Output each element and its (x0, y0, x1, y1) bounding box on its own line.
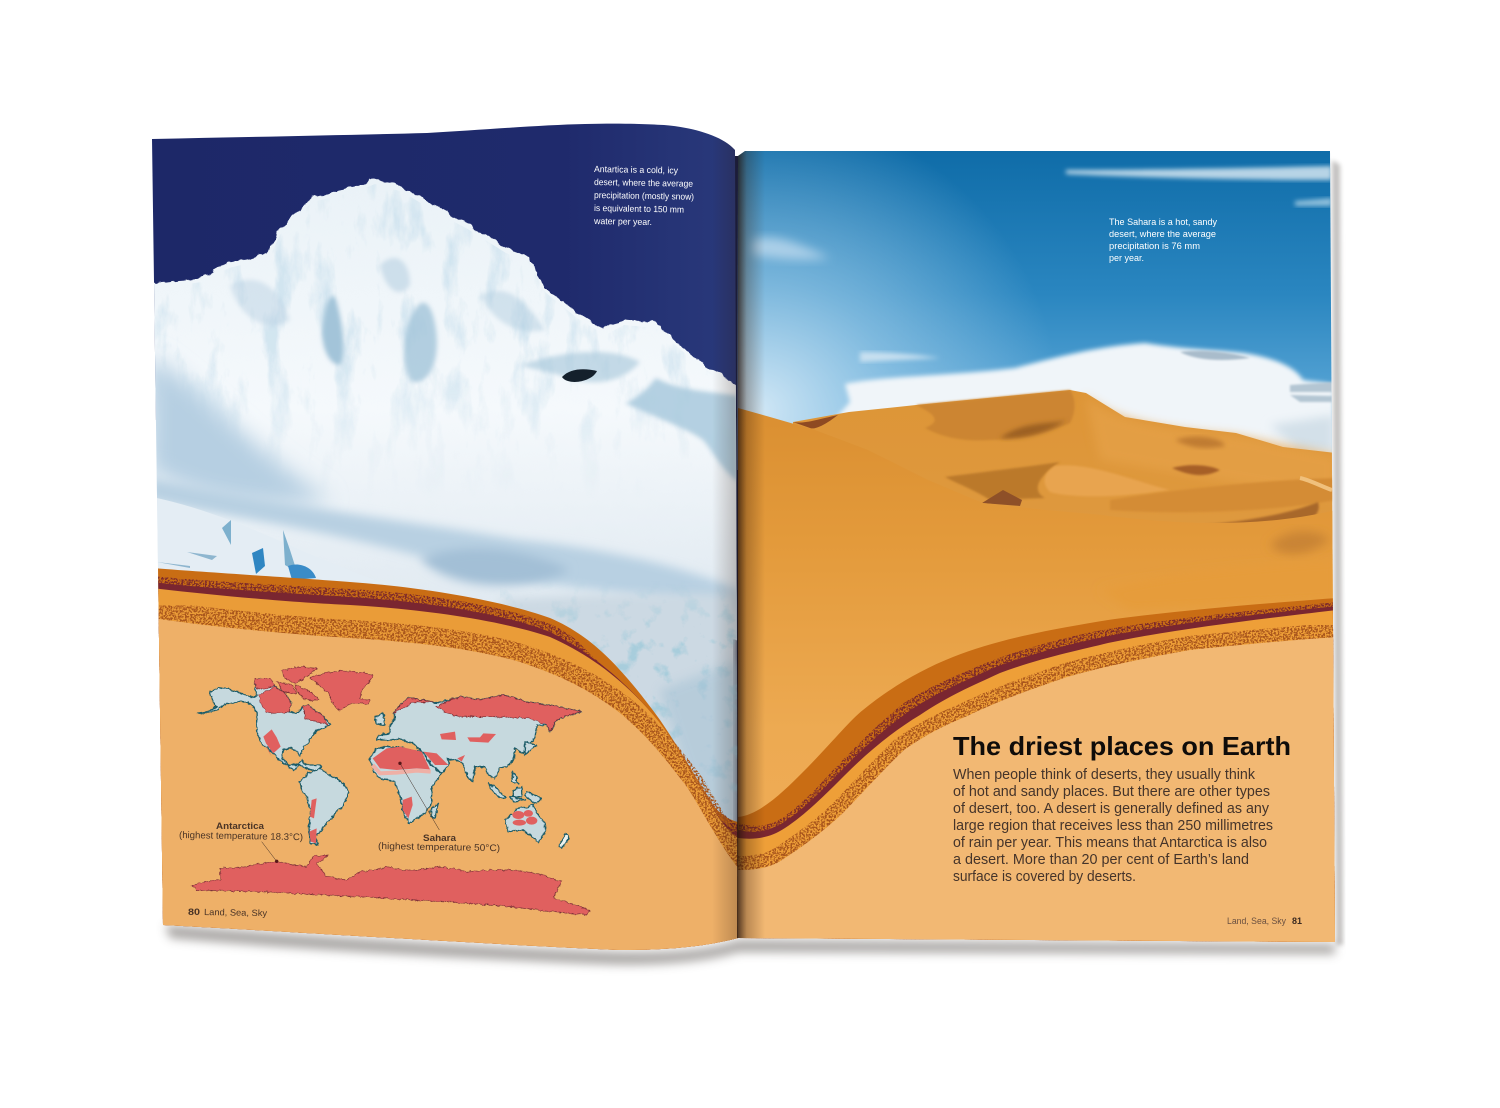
body text: When people think of deserts, they usually think (953, 767, 1256, 783)
map label: Antarctica: (highest temperature 18.3°C) (179, 830, 303, 843)
long snow shadow band (150, 478, 738, 612)
layered band: light orange (738, 610, 1340, 945)
spine shading right (737, 150, 765, 950)
continents (197, 678, 582, 848)
dark cave (562, 369, 597, 382)
panel: right page Sahara (735, 150, 1340, 950)
caption: Antarctica: desert, where the average (594, 177, 693, 189)
body text: of hot and sandy places. But there are other types (953, 784, 1270, 800)
panel: left page Antarctica (145, 120, 745, 960)
map label: Sahara: (highest temperature 50°C) (378, 841, 500, 854)
map label: Antarctica (179, 821, 303, 843)
desert regions (255, 667, 582, 732)
caption: Antarctica: precipitation (mostly snow) (594, 190, 694, 202)
night-blue sky (150, 120, 740, 420)
caption: Antarctica: water per year. (593, 216, 652, 227)
lower-left glacier seracs (157, 498, 316, 579)
body text (953, 767, 1273, 885)
near dune and foreground sand (738, 408, 1336, 945)
right page tan background (738, 637, 1340, 945)
body text: surface is covered by deserts. (953, 869, 1136, 885)
book drop shadow (165, 160, 1343, 965)
caption: Sahara: desert, where the average (1109, 229, 1216, 239)
body text: a desert. More than 20 per cent of Earth’s land (953, 852, 1249, 868)
layered band: light orange (152, 588, 738, 950)
layered band: dark orange (152, 568, 738, 950)
icy lower-right texture (500, 592, 738, 822)
body text: of rain per year. This means that Antarctica is also (953, 835, 1267, 851)
caption: Sahara: The Sahara is a hot, sandy (1109, 217, 1217, 227)
caption: Sahara: precipitation is 76 mm (1109, 241, 1200, 251)
caption: Sahara: per year. (1109, 253, 1144, 263)
heading: The driest places on Earth (953, 731, 1291, 761)
left page tan background (152, 618, 738, 955)
layered band: dark orange (738, 598, 1340, 945)
far dune slip face (793, 390, 1336, 500)
mid dune ridges and shadows (945, 462, 1336, 529)
shadow patch in valley (420, 549, 570, 585)
footer left: Land, Sea, Sky (204, 907, 268, 918)
caption: Antarctica: Antartica is a cold, icy (594, 164, 679, 175)
map label: Antarctica: Antarctica (216, 821, 265, 832)
snow mountain (145, 175, 745, 640)
strip behind the spine (733, 156, 745, 938)
footer left: 80 (188, 907, 200, 917)
spine shading left (716, 139, 738, 942)
world map of deserts (192, 667, 590, 915)
Antarctica continent (192, 855, 590, 915)
footer right: 81 (1292, 916, 1302, 926)
leader line: Sahara (398, 762, 439, 830)
footer right: Land, Sea, Sky (1227, 916, 1286, 926)
open book spread illustration (152, 124, 1346, 971)
map label: Sahara: Sahara (423, 833, 457, 844)
desert halo (373, 765, 431, 773)
body text: of desert, too. A desert is generally defined as any (953, 801, 1270, 817)
map label: Sahara (378, 833, 500, 854)
clouds (752, 166, 1334, 470)
blue sky (735, 150, 1340, 470)
ice creases on mountain face (230, 258, 640, 382)
caption: Sahara (1109, 217, 1217, 263)
caption: Antarctica (593, 164, 694, 227)
shadowed left slope (150, 355, 330, 504)
leader line: Antarctica (262, 842, 278, 863)
far dune (793, 390, 1336, 560)
layered band: dark red speckle (152, 576, 738, 950)
caption: Antarctica: is equivalent to 150 mm (594, 203, 684, 215)
layered band: dark red speckle (738, 602, 1340, 945)
body text: large region that receives less than 250 millimetres (953, 818, 1273, 834)
blue ice wall on right (625, 378, 738, 482)
